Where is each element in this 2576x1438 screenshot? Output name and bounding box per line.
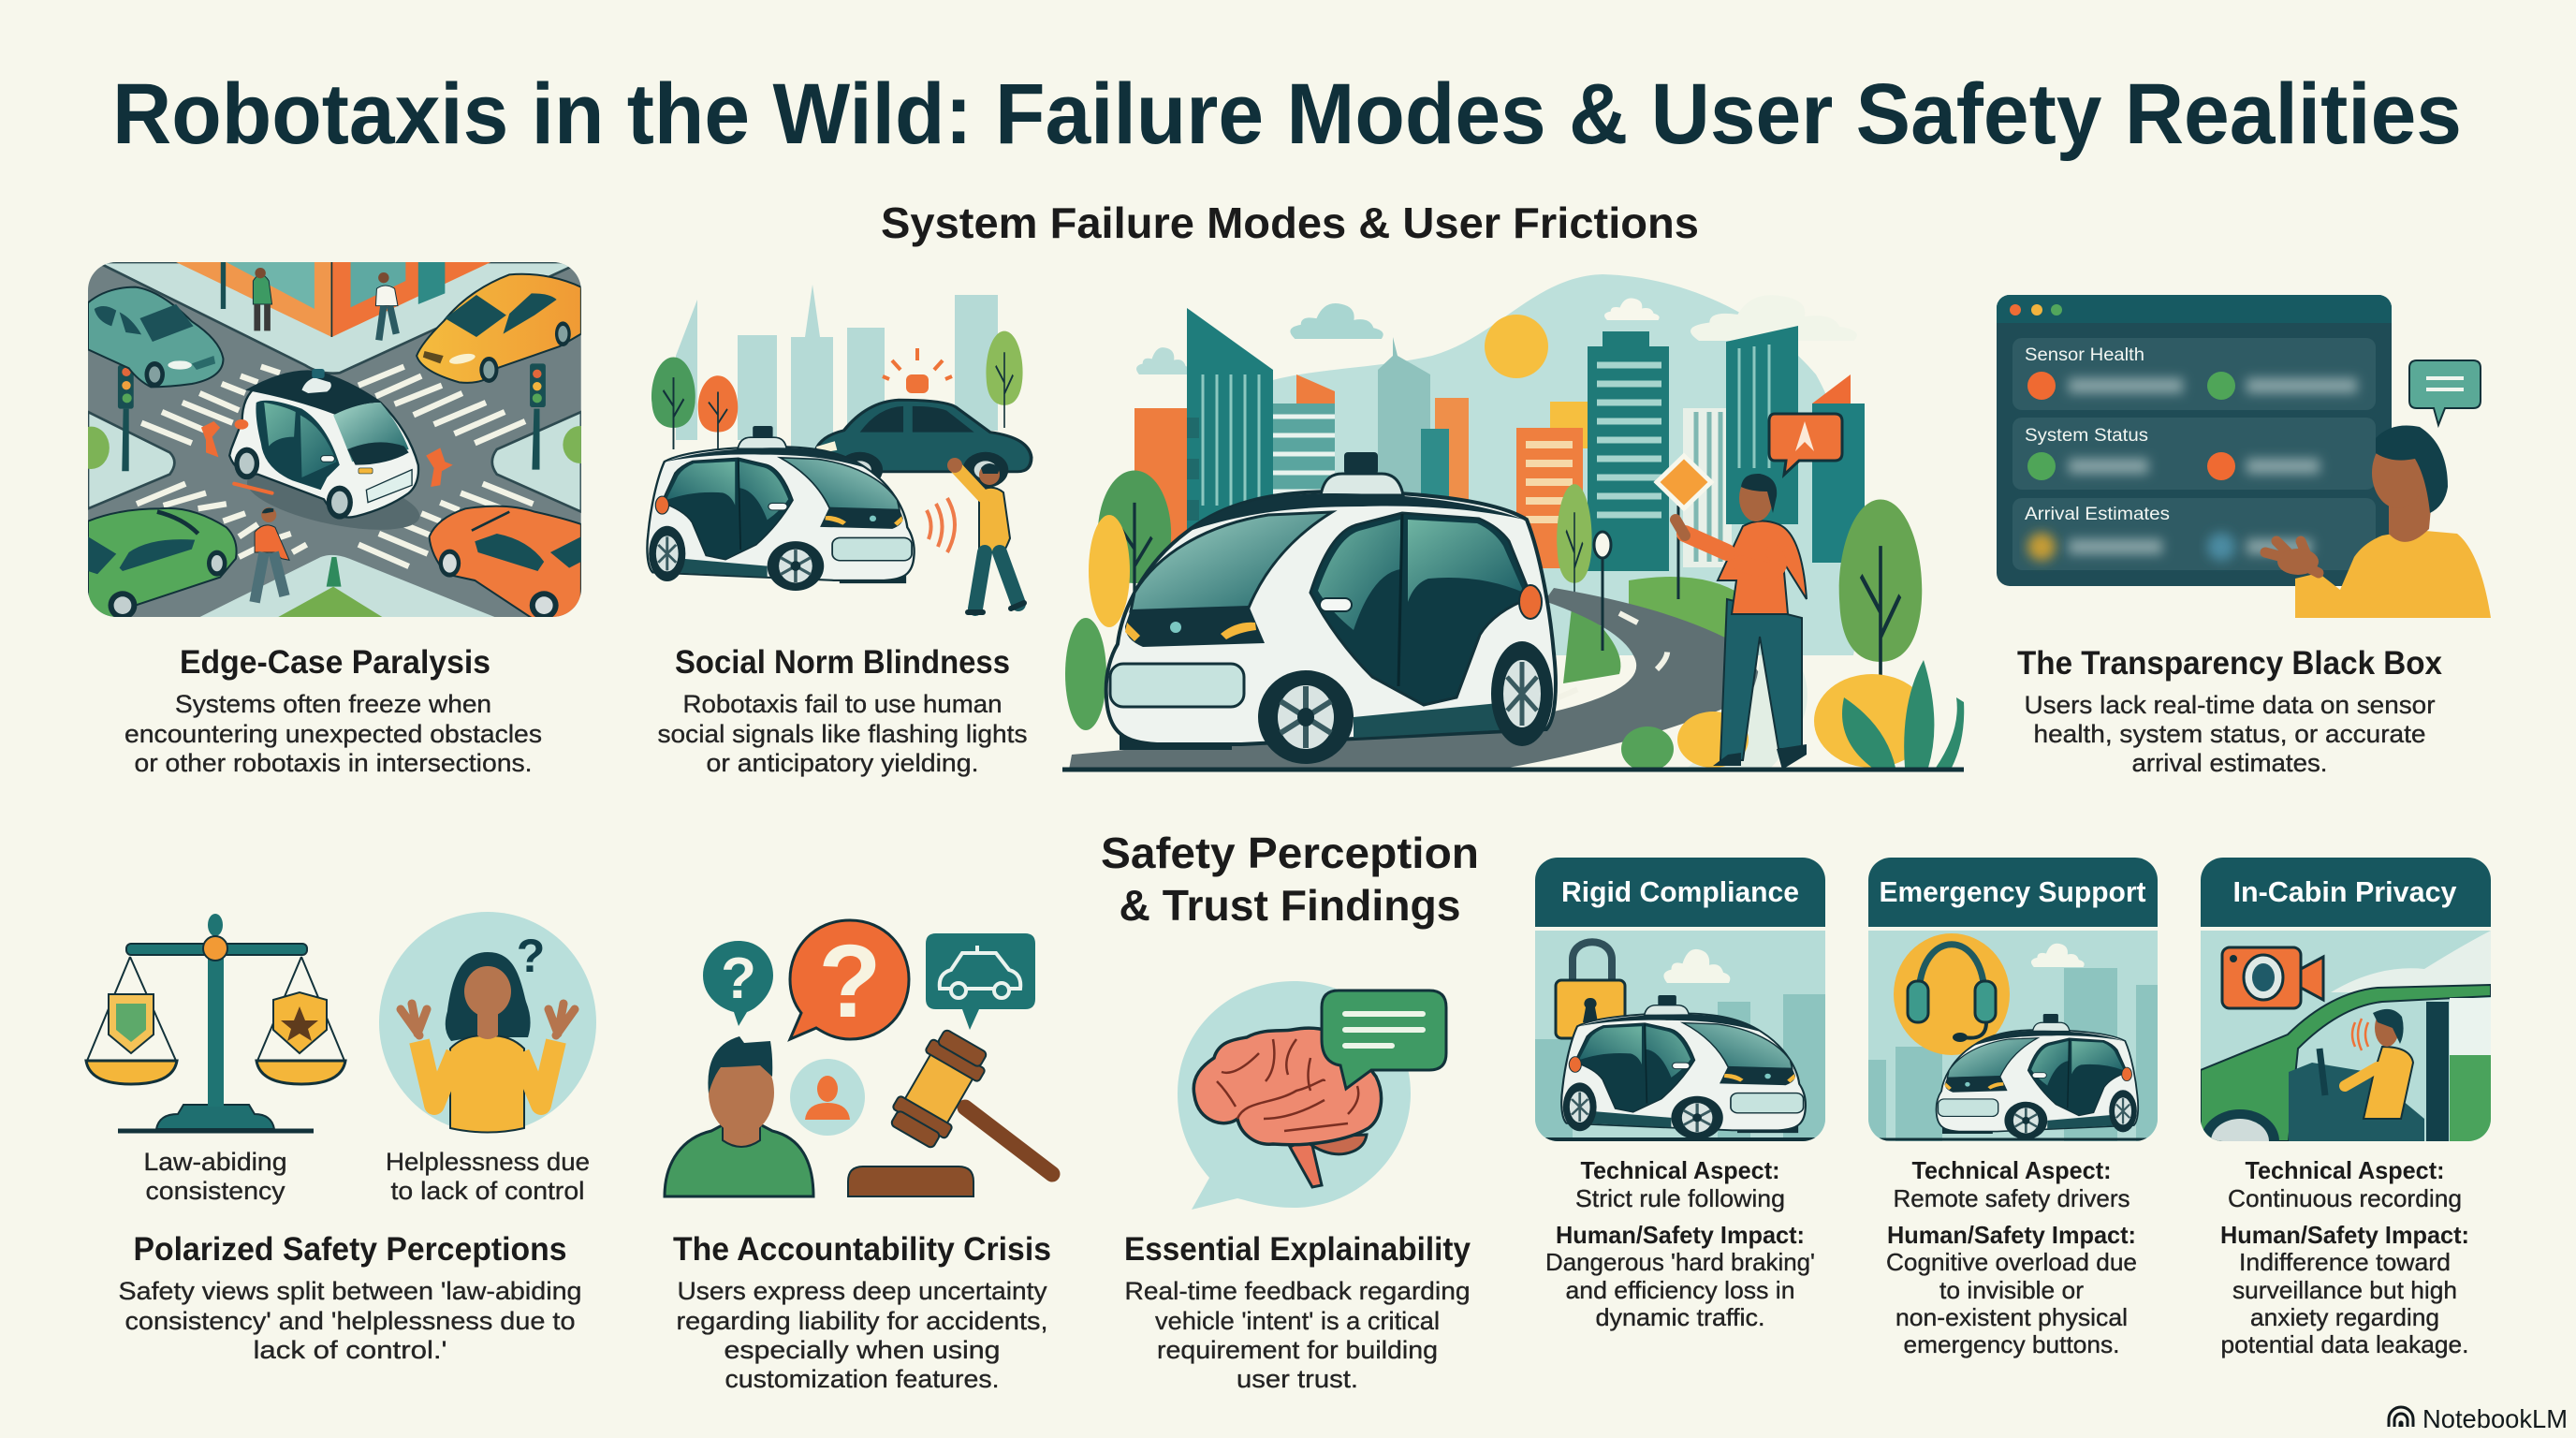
- labels under icons: [144, 1148, 590, 1205]
- dashboard labels: Arrival Estimates: [2025, 505, 2170, 524]
- description: regarding liability for accidents,: [676, 1307, 1048, 1335]
- robotaxi center: [201, 369, 453, 542]
- description: especially when using: [724, 1336, 1000, 1364]
- description: consistency' and 'helplessness due to: [125, 1307, 575, 1335]
- panel: in-cabin privacy: [2201, 858, 2491, 1358]
- description: Real-time feedback regarding: [1125, 1277, 1470, 1305]
- yellow car: [417, 274, 581, 383]
- card text: Technical Aspect:: [2245, 1156, 2445, 1184]
- panel: social norm blindness: [647, 285, 1032, 777]
- speech bubble: [1769, 414, 1842, 475]
- panel: emergency support: [1868, 858, 2158, 1358]
- card text: surveillance but high: [2232, 1276, 2457, 1304]
- panel: rigid compliance: [1535, 858, 1825, 1331]
- signal waves: [927, 498, 955, 552]
- card illustration: camera and car cabin: [2201, 931, 2491, 1141]
- description: Users express deep uncertainty: [678, 1277, 1047, 1305]
- panel: essential explainability: [1124, 981, 1471, 1393]
- description: or other robotaxis in intersections.: [135, 749, 532, 777]
- card text: Cognitive overload due: [1886, 1248, 2137, 1276]
- description: [676, 1277, 1048, 1393]
- card text: potential data leakage.: [2220, 1330, 2469, 1358]
- illustration: questions and gavel: ?: [818, 924, 882, 1039]
- card title: In-Cabin Privacy: [2233, 875, 2457, 908]
- card illustration: lock and robotaxi: [1535, 931, 1825, 1141]
- card text: [1545, 1156, 1815, 1331]
- dashboard labels: System Status: [2025, 426, 2148, 446]
- sky blob: [1217, 274, 1861, 655]
- illustration: questions and gavel: ?: [721, 946, 756, 1011]
- description: [2024, 691, 2436, 777]
- description: social signals like flashing lights: [657, 720, 1028, 748]
- dashboard illustration: [1997, 295, 2392, 586]
- description: requirement for building: [1157, 1336, 1438, 1364]
- card text: Indifference toward: [2239, 1248, 2451, 1276]
- title: Robotaxis in the Wild: Failure Modes & User Safety Realities: [112, 66, 2462, 162]
- description: [1125, 1277, 1470, 1393]
- section heading: safety perception: Safety Perception: [1101, 829, 1479, 877]
- description: [118, 1277, 582, 1364]
- icon: balance scale: [86, 914, 345, 1131]
- sun: [1485, 315, 1548, 378]
- card header: [1868, 858, 2158, 927]
- watermark: NotebookLM: NotebookLM: [2422, 1404, 2568, 1433]
- card text: Technical Aspect:: [1580, 1156, 1780, 1184]
- card text: emergency buttons.: [1904, 1330, 2119, 1358]
- card text: and efficiency loss in: [1565, 1276, 1795, 1304]
- card text: Continuous recording: [2228, 1184, 2462, 1212]
- card text: Dangerous 'hard braking': [1545, 1248, 1815, 1276]
- description: or anticipatory yielding.: [706, 749, 979, 777]
- labels under icons: consistency: [146, 1177, 285, 1205]
- heading: Social Norm Blindness: [675, 644, 1010, 681]
- description: [124, 690, 542, 777]
- section heading: system failure modes: System Failure Modes & User Frictions: [881, 198, 1699, 247]
- trees: [1065, 470, 1922, 730]
- description: vehicle 'intent' is a critical: [1155, 1307, 1440, 1335]
- robotaxi: [1106, 452, 1556, 764]
- orange car: [430, 506, 581, 620]
- card text: to invisible or: [1939, 1276, 2084, 1304]
- robotaxi: [647, 426, 915, 591]
- card text: dynamic traffic.: [1595, 1303, 1765, 1331]
- description: [657, 690, 1028, 777]
- labels under icons: Helplessness due: [386, 1148, 590, 1176]
- pedestrian: [947, 458, 1024, 612]
- illustration: intersection: [73, 262, 597, 620]
- siren: [883, 348, 952, 393]
- description: encountering unexpected obstacles: [124, 720, 542, 748]
- section heading: safety perception: [1101, 829, 1479, 930]
- road: [1069, 588, 1808, 770]
- description: arrival estimates.: [2132, 749, 2327, 777]
- heading: The Accountability Crisis: [673, 1231, 1051, 1268]
- icon: helpless woman: ?: [517, 930, 545, 982]
- illustration: questions and gavel: [665, 920, 1052, 1196]
- heading: Essential Explainability: [1124, 1231, 1471, 1268]
- description: Safety views split between 'law-abiding: [118, 1277, 582, 1305]
- description: Systems often freeze when: [175, 690, 491, 718]
- icon: brain with speech bubble: [1178, 981, 1446, 1210]
- panel: polarized safety perceptions: [86, 912, 596, 1364]
- card header: [1535, 858, 1825, 927]
- card text: [2220, 1156, 2469, 1358]
- heading: The Transparency Black Box: [2017, 645, 2442, 682]
- worried user: [2265, 425, 2491, 618]
- illustration: skyline, taxi and pedestrian: [647, 285, 1032, 612]
- buildings: [1134, 308, 1865, 577]
- description: customization features.: [724, 1365, 1000, 1393]
- panel: accountability crisis: [665, 920, 1052, 1393]
- pedestrians: [253, 268, 398, 602]
- card title: Rigid Compliance: [1561, 875, 1799, 908]
- dashboard labels: [2025, 345, 2170, 524]
- description: lack of control.': [253, 1336, 447, 1364]
- description: user trust.: [1237, 1365, 1358, 1393]
- hero illustration: city, robotaxi and rider: [1062, 274, 1964, 771]
- heading: Edge-Case Paralysis: [180, 644, 490, 681]
- description: health, system status, or accurate: [2033, 720, 2426, 748]
- card text: Technical Aspect:: [1911, 1156, 2112, 1184]
- card text: non-existent physical: [1895, 1303, 2128, 1331]
- card text: Human/Safety Impact:: [1887, 1221, 2136, 1249]
- card text: Remote safety drivers: [1893, 1184, 2130, 1212]
- card illustration: headset and robotaxi: [1868, 931, 2158, 1141]
- icon: helpless woman: [379, 912, 596, 1133]
- panel: transparency black box: [1997, 295, 2491, 777]
- dashboard labels: Sensor Health: [2025, 345, 2144, 365]
- card text: Human/Safety Impact:: [2220, 1221, 2469, 1249]
- dark sedan: [814, 400, 1032, 488]
- section heading: safety perception: & Trust Findings: [1120, 881, 1460, 930]
- rider: [1676, 474, 1807, 770]
- crosswalks: [137, 367, 533, 566]
- heading: Polarized Safety Perceptions: [133, 1231, 567, 1268]
- ground line: [1062, 768, 1964, 771]
- card text: Human/Safety Impact:: [1556, 1221, 1805, 1249]
- labels under icons: Law-abiding: [144, 1148, 286, 1176]
- foliage right: [1621, 660, 1964, 771]
- panel: edge-case paralysis: [73, 262, 597, 777]
- clouds: [1136, 295, 1857, 374]
- labels under icons: to lack of control: [391, 1177, 584, 1205]
- traffic lights: [118, 262, 546, 471]
- card text: anxiety regarding: [2250, 1303, 2439, 1331]
- teal car: [88, 287, 223, 388]
- green car: [88, 508, 237, 620]
- card header: [2201, 858, 2491, 927]
- road sign: [1594, 456, 1711, 651]
- card text: Strict rule following: [1575, 1184, 1785, 1212]
- description: Users lack real-time data on sensor: [2024, 691, 2436, 719]
- description: Robotaxis fail to use human: [683, 690, 1002, 718]
- card title: Emergency Support: [1880, 875, 2145, 908]
- speech bubble: [2409, 360, 2481, 425]
- card text: [1886, 1156, 2137, 1358]
